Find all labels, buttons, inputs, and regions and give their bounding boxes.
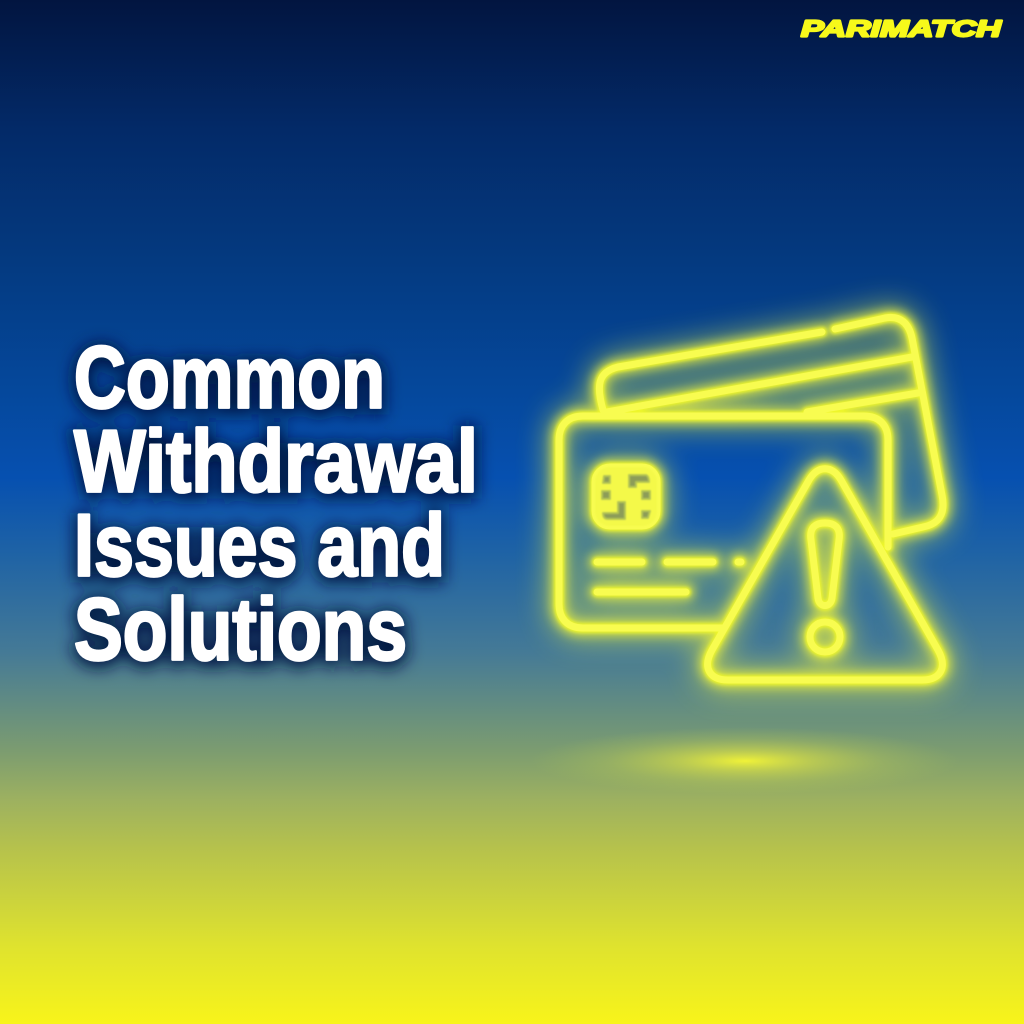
title bbox=[74, 328, 478, 681]
title: Withdrawal bbox=[74, 414, 478, 513]
title: Common bbox=[74, 330, 385, 429]
title: Withdrawal bbox=[74, 412, 478, 510]
title: Common bbox=[74, 328, 385, 426]
icon: card chip contacts bbox=[595, 467, 657, 526]
title: Issues and bbox=[74, 498, 445, 597]
icon: neon credit cards with warning triangle bbox=[559, 317, 943, 680]
glow reflection beneath icon bbox=[530, 727, 960, 795]
title: Issues and bbox=[74, 496, 445, 594]
title: Solutions bbox=[74, 580, 407, 678]
logo: Parimatch: PARIMATCH bbox=[801, 16, 1002, 42]
title: Solutions bbox=[74, 582, 407, 681]
